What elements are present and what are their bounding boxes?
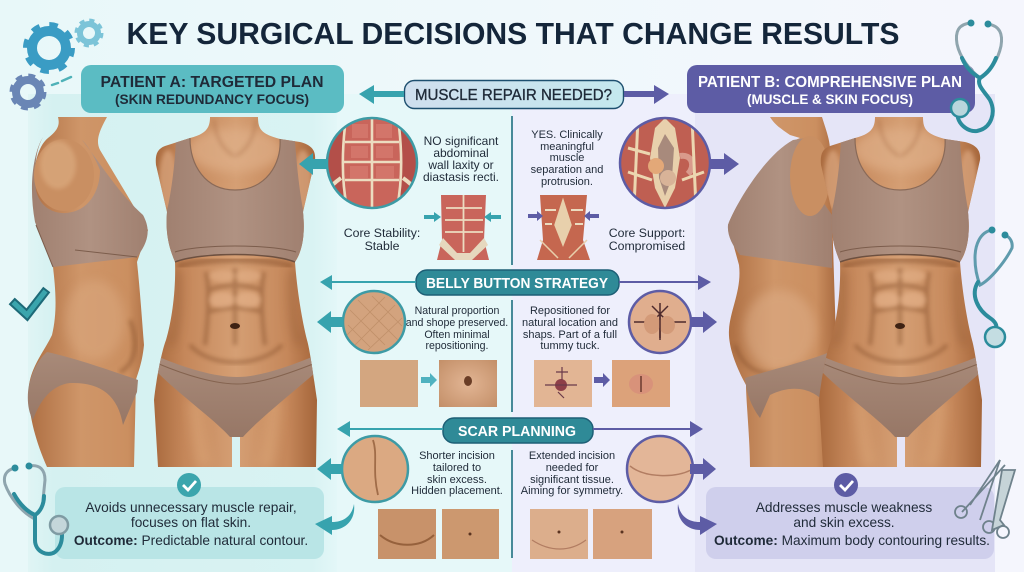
text: scar B: Aiming for symmetry. xyxy=(521,485,623,497)
photo: navel before B xyxy=(534,360,592,407)
outcome panel: patient A: Outcome: Predictable natural contour. xyxy=(74,533,308,548)
muscle circle: patient A xyxy=(322,118,422,208)
panel: patient A centre column background xyxy=(337,94,512,572)
icon: gears xyxy=(12,20,102,108)
outcome panel: patient B xyxy=(706,487,994,559)
panel heading: patient B: (MUSCLE & SKIN FOCUS) xyxy=(747,91,913,107)
arrow: curved to outcome B xyxy=(678,504,717,535)
text: belly button B: tummy tuck. xyxy=(540,340,600,352)
text: belly button A: repositioning. xyxy=(425,340,489,352)
figure: patient A front view xyxy=(150,110,322,470)
photo: navel after A xyxy=(439,360,497,407)
arrow: scar B to body xyxy=(690,458,716,480)
arrow: belly button B to body xyxy=(690,311,717,333)
arrow: belly button to patient B xyxy=(619,275,711,290)
text: scar B: needed for xyxy=(546,462,599,474)
text: muscle A finding: abdominal xyxy=(433,146,489,160)
text: core stability: Core Stability: xyxy=(344,226,420,240)
text: belly button A: and shope preserved. xyxy=(406,317,508,329)
central divider xyxy=(511,116,513,558)
panel heading: patient B: PATIENT B: COMPREHENSIVE PLAN xyxy=(698,74,962,91)
outcome panel: patient A: Avoids unnecessary muscle repair, xyxy=(85,500,297,515)
scar circle: patient B xyxy=(627,436,693,502)
muscle circle: patient B xyxy=(620,118,710,208)
skin circle: patient B belly button xyxy=(629,291,691,353)
text: scar B: Extended incision xyxy=(529,450,615,462)
arrow: muscle A to body xyxy=(299,153,328,175)
text: muscle B finding: separation and xyxy=(531,164,603,176)
diagram: small muscle B xyxy=(528,195,599,260)
section heading: belly button strategy: BELLY BUTTON STRATEGY xyxy=(426,275,608,292)
arrow: scar planning to patient B xyxy=(593,421,703,437)
arrow: muscle repair to patient B xyxy=(624,85,669,104)
outcome panel: patient A: focuses on flat skin. xyxy=(131,515,251,530)
arrow: scar planning to patient A xyxy=(337,421,443,437)
arrow: scar A to body xyxy=(317,458,343,480)
icon: surgical scissors xyxy=(955,460,1015,538)
text: core support: Core Support: xyxy=(609,226,685,240)
callout: muscle repair question: MUSCLE REPAIR NEEDED? xyxy=(415,87,612,104)
text: core support xyxy=(609,226,685,253)
arrow: curved to outcome A xyxy=(315,504,354,535)
scar circle: patient A xyxy=(342,436,408,502)
text: belly button A: Often minimal xyxy=(424,329,490,341)
text: muscle B finding xyxy=(531,129,603,188)
text: belly button B: shaps. Part of a full xyxy=(523,329,617,341)
outcome panel: patient B: Outcome: Maximum body contouring results. xyxy=(714,533,990,548)
title: KEY SURGICAL DECISIONS THAT CHANGE RESULTS xyxy=(126,16,900,51)
text: muscle A finding xyxy=(423,134,499,184)
photo: scar after A xyxy=(442,509,499,559)
outcome panel: patient B: Addresses muscle weakness xyxy=(756,500,932,515)
section heading: scar planning: SCAR PLANNING xyxy=(458,423,576,440)
arrow: belly button A to body xyxy=(317,311,343,333)
text: core stability xyxy=(344,226,420,253)
arrow: muscle B to body xyxy=(709,153,739,175)
photo: skin before A xyxy=(360,360,418,407)
text: belly button B xyxy=(522,305,618,352)
panel: patient B background xyxy=(695,94,995,572)
skin circle: patient A belly button xyxy=(343,291,405,353)
icon: stethoscope bottom left xyxy=(4,463,68,554)
panel: patient B centre column background xyxy=(512,94,695,572)
icon: stethoscope right side xyxy=(975,227,1012,347)
text: belly button A: Natural proportion xyxy=(415,305,500,317)
text: belly button B: natural location and xyxy=(522,317,618,329)
text: scar A xyxy=(411,450,503,497)
photo: navel after B xyxy=(612,360,670,407)
panel heading: patient A xyxy=(81,65,344,113)
text: scar B: significant tissue. xyxy=(530,474,614,486)
panel: patient A background xyxy=(28,94,337,572)
photo: scar before A xyxy=(378,509,436,559)
text: muscle B finding: YES. Clinically xyxy=(531,129,603,141)
text: scar A: skin excess. xyxy=(427,474,487,486)
icon: check badge B xyxy=(834,473,858,497)
text: muscle A finding: NO significant xyxy=(424,134,499,148)
arrow: belly button to patient A xyxy=(320,275,416,290)
arrow: muscle repair to patient A xyxy=(359,85,404,104)
photo: scar before B xyxy=(530,509,588,559)
icon: check mark xyxy=(15,293,44,315)
text: scar A: Shorter incision xyxy=(419,450,495,462)
text: core stability: Stable xyxy=(365,239,400,253)
panel heading: patient B xyxy=(687,65,975,113)
photo: scar after B xyxy=(593,509,652,559)
outcome panel: patient A xyxy=(55,487,324,559)
arrow: before to after B xyxy=(594,373,610,387)
text: muscle B finding: muscle xyxy=(550,152,584,164)
outcome panel: patient B: and skin excess. xyxy=(793,515,895,530)
panel heading: patient A: PATIENT A: TARGETED PLAN xyxy=(100,74,324,91)
text: scar A: tailored to xyxy=(433,462,481,474)
section heading: scar planning xyxy=(443,418,593,443)
text: core support: Compromised xyxy=(609,239,685,253)
diagram: small muscle A xyxy=(424,195,501,260)
figure: patient B front view xyxy=(815,110,987,470)
figure: patient B side view xyxy=(728,117,836,467)
text: muscle A finding: wall laxity or xyxy=(427,158,494,172)
icon: stethoscope top right xyxy=(951,20,1002,131)
text: muscle A finding: diastasis recti. xyxy=(423,170,499,184)
figure: patient A side view xyxy=(28,117,148,467)
text: belly button B: Repositioned for xyxy=(530,305,610,317)
text: scar B xyxy=(521,450,623,497)
arrow: before to after A xyxy=(421,373,437,387)
text: scar A: Hidden placement. xyxy=(411,485,503,497)
icon: check badge A xyxy=(177,473,201,497)
text: muscle B finding: protrusion. xyxy=(541,176,593,188)
panel heading: patient A: (SKIN REDUNDANCY FOCUS) xyxy=(115,91,309,107)
callout: muscle repair question xyxy=(404,80,624,108)
text: belly button A xyxy=(406,305,508,352)
section heading: belly button strategy xyxy=(416,270,619,295)
text: muscle B finding: meaningful xyxy=(540,141,594,153)
